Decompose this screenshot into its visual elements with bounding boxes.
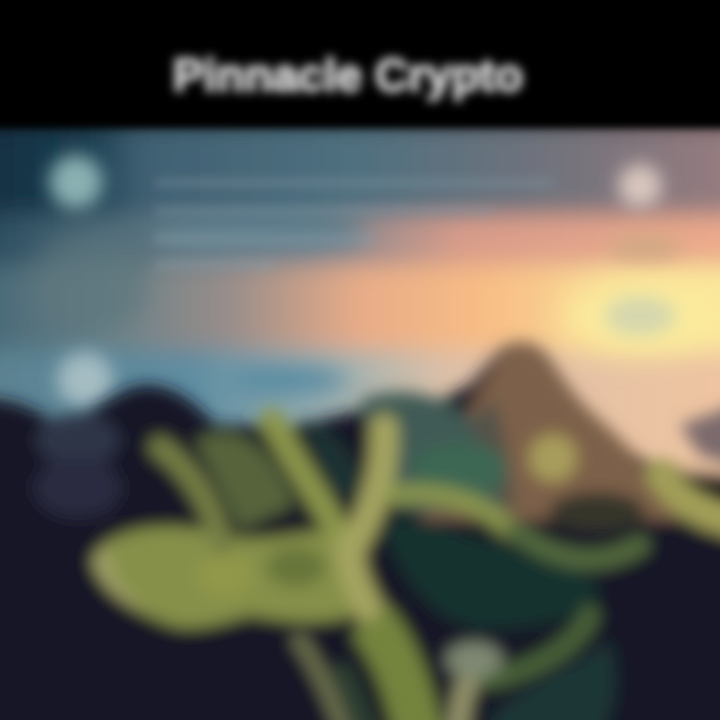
branch: right (395, 494, 510, 530)
landscape (0, 342, 720, 720)
grey right hill (680, 400, 720, 470)
finger: middle (272, 420, 345, 545)
title: Pinnacle Crypto (173, 49, 523, 101)
finger: right (350, 428, 384, 620)
dark hill tones (36, 414, 120, 466)
valley (382, 520, 600, 630)
icon: left lower circle (57, 352, 113, 408)
icon: left top circle (49, 155, 103, 209)
yellow blob (529, 434, 577, 482)
brown dark patch (549, 492, 645, 532)
distant green slope (360, 392, 500, 510)
sky background (0, 120, 720, 480)
strip right (662, 475, 720, 522)
callout: sun glow (560, 280, 720, 352)
text block: right small (609, 234, 681, 262)
gaps between fingers (300, 420, 365, 500)
lower branch (490, 615, 590, 680)
text block: faint sky lines (155, 178, 555, 270)
header band (0, 0, 720, 128)
stem (370, 620, 422, 720)
mountain peak (420, 342, 680, 520)
palm (92, 527, 372, 628)
finger: left (160, 447, 222, 545)
icon: right top circle (618, 164, 662, 208)
ground base (0, 342, 720, 720)
